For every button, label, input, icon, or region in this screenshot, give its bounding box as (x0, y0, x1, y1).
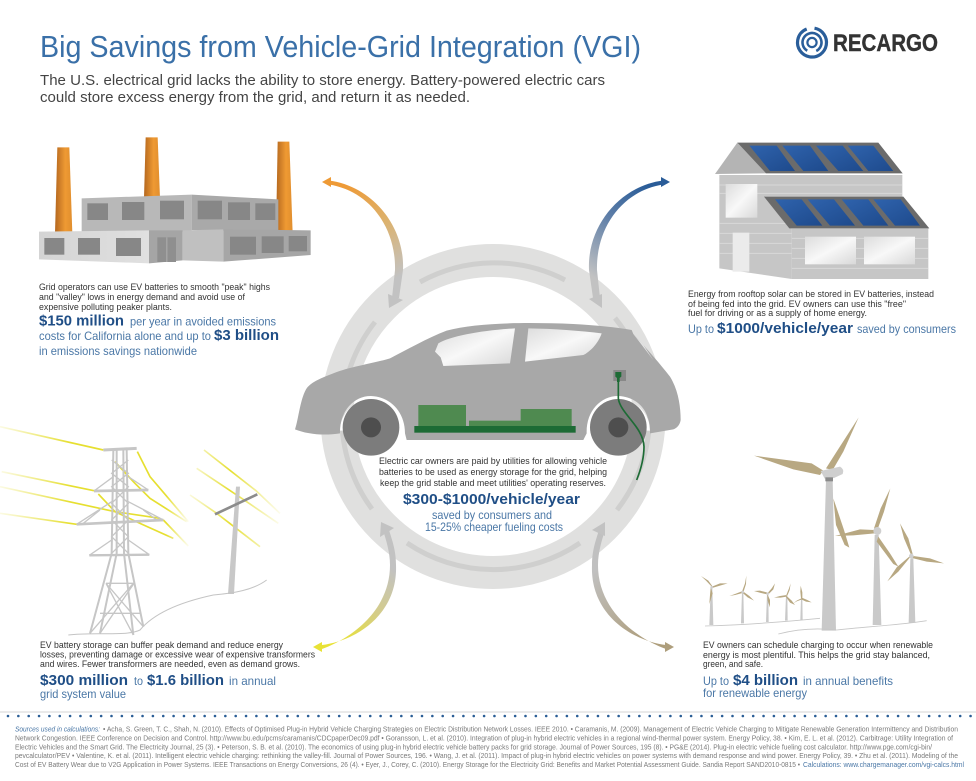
footer: sources: Cost of EV Battery Wear due to V2G Application in Power Systems. IEEE Transactions on Energy Conversions, 26 (4). • Eyer, J., Corey, C. (2010). Energy Storage for the Electricity Grid: Benefits and Market Potential Assessment Guide. Sandia Report SAND2010-0815 • (15, 760, 800, 769)
subtitle: The U.S. electrical grid lacks the ability to store energy. Battery-powered electric cars (40, 72, 605, 89)
text: grid storage: to (134, 675, 143, 688)
arrow: car to wind farm (592, 522, 674, 652)
text: grid operators: costs for California alone and up to (39, 330, 211, 343)
text: rooftop solar: $1000/vehicle/year (717, 320, 853, 337)
text: renewable energy: $4 billion (733, 672, 798, 689)
text: grid storage: EV battery storage can buffer peak demand and reduce energy (40, 640, 283, 651)
subtitle: could store excess energy from the grid, and return it as needed. (40, 89, 470, 106)
text: grid operators: per year in avoided emissions (130, 316, 276, 328)
text: grid storage: and wires. Fewer transformers are needed, even as demand grows. (40, 659, 300, 670)
footer: sources: Calculations: www.chargemanager.com/vgi-calcs.html (803, 760, 964, 769)
text: grid operators: Grid operators can use EV batteries to smooth "peak" highs (39, 282, 270, 293)
text: rooftop solar: fuel for driving or as a supply of home energy. (688, 308, 867, 319)
icon: solar house (715, 143, 929, 279)
text: grid operators: $3 billion (214, 327, 279, 344)
turbine hubs (710, 467, 914, 595)
text: central description: batteries to be used as energy storage for the grid, helping (379, 467, 607, 478)
logo: RECARGO: RECARGO (833, 30, 938, 57)
text: grid operators: expensive polluting peaker plants. (39, 302, 172, 313)
text: grid storage: grid system value (40, 688, 126, 701)
pole (228, 487, 240, 594)
power lines (0, 427, 280, 547)
icon: wind turbines (701, 417, 944, 634)
footer: sources: Electric Vehicles and the Smart Grid. The Electricity Journal, 25 (3). • Peterson, S. B. et al. (2010). The economics of using plug-in hybrid electric vehicle battery packs for grid storage. Journal of Power Sources, 195 (8). • PG&E (2014). Plug-in electric vehicle fueling cost calculator. http://www.pge.com/cgi-bin/ (15, 742, 932, 752)
charging plug and cable (613, 370, 644, 480)
ground lines (705, 618, 927, 634)
text: grid storage: $1.6 billion (147, 672, 224, 689)
ground (68, 580, 267, 635)
text: renewable energy: Up to (703, 675, 729, 688)
text: grid storage: in annual (229, 675, 276, 688)
arrow: car to solar house (589, 177, 670, 308)
text: rooftop solar: Energy from rooftop solar can be stored in EV batteries, instead (688, 289, 934, 300)
title: Big Savings from Vehicle-Grid Integration (VGI) (40, 30, 641, 64)
turbine towers (709, 480, 915, 631)
tower structure (77, 448, 163, 635)
text: grid operators (39, 282, 279, 358)
text: renewable energy: green, and safe. (703, 659, 763, 670)
logo: RECARGO (795, 26, 938, 59)
icon: electric car (295, 323, 681, 480)
text: grid storage (40, 640, 315, 701)
text: renewable energy (703, 640, 933, 700)
icon: factory (39, 137, 311, 263)
text: renewable energy: EV owners can schedule charging to occur when renewable (703, 640, 933, 651)
car windows (435, 328, 602, 366)
arrow: car to power grid (313, 522, 396, 652)
text: rooftop solar: saved by consumers (857, 323, 956, 336)
text: renewable energy: energy is most plentiful. This helps the grid stay balanced, (703, 650, 930, 661)
text: renewable energy: for renewable energy (703, 687, 807, 700)
turbine blades (701, 417, 944, 607)
text: central description: keep the grid stable and meet utilities' operating reserves. (380, 478, 606, 489)
central ring (337, 260, 650, 572)
icon: transmission tower and power pole (0, 427, 280, 635)
car wheels (343, 399, 647, 456)
text: central description (379, 456, 607, 534)
footer: sources: Sources used in calculations: (15, 724, 100, 734)
text: central description: Electric car owners are paid by utilities for allowing vehicle (379, 456, 607, 467)
text: rooftop solar (688, 289, 956, 337)
text: grid operators: and "valley" lows in energy demand and avoid use of (39, 292, 245, 303)
text: central description: 15-25% cheaper fueling costs (425, 521, 563, 534)
arrow: car to factory (322, 177, 403, 308)
text: renewable energy: in annual benefits (803, 675, 893, 688)
text: central description: saved by consumers and (432, 509, 552, 522)
text: grid operators: in emissions savings nationwide (39, 345, 197, 358)
subtitle (40, 72, 605, 106)
text: rooftop solar: Up to (688, 323, 714, 336)
footer: sources (15, 724, 964, 769)
text: grid storage: $300 million (40, 672, 128, 689)
text: rooftop solar: of being fed into the grid. EV owners can use this "free" (688, 299, 906, 310)
text: grid operators: $150 million (39, 312, 124, 330)
car battery (414, 405, 576, 433)
text: grid storage: losses, preventing damage or excessive wear of expensive transformers (40, 650, 315, 660)
text: central description: $300-$1000/vehicle/year (403, 491, 580, 508)
